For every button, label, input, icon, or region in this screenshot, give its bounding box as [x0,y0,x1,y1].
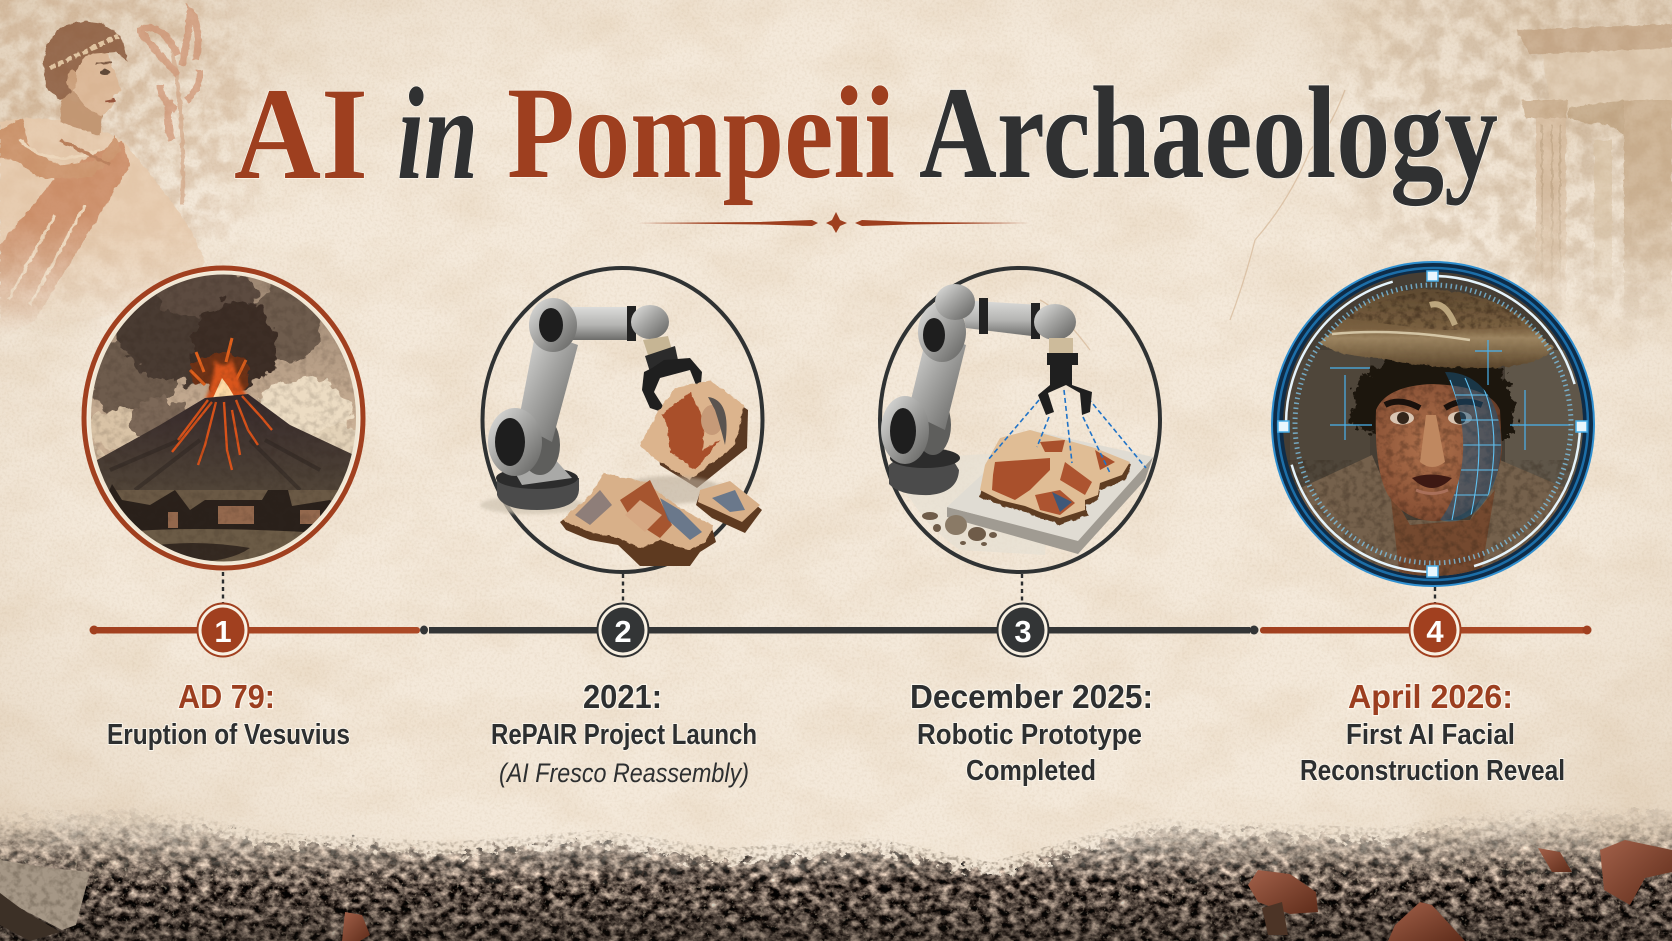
title: Archaeology [919,59,1498,206]
stone slab [0,860,90,930]
caption 4: First AI Facial [1346,719,1515,751]
rust rocks [342,840,1672,941]
scanning table [890,430,1153,555]
caption 1: AD 79: [178,678,275,715]
robot arm 3 [881,284,1092,495]
title: in [397,60,478,207]
title ornament [637,212,1031,233]
caption 4: Reconstruction Reveal [1300,755,1565,787]
scan lines [988,390,1146,473]
title: AI [234,60,368,207]
illustration 2: robot arm lifting fresco fragment [480,268,762,572]
timeline bar [90,626,1592,634]
robot arm 2 [480,298,702,514]
caption 2: (AI Fresco Reassembly) [499,758,749,788]
caption 2: 2021: [583,678,662,715]
fresco pieces on table [980,430,1131,525]
fragment held by the robot [640,381,748,488]
caption 3: December 2025: [910,678,1153,715]
illustration 3: robot arm scanning fresco on table [880,268,1160,572]
caption 2: RePAIR Project Launch [491,719,757,751]
milestone node 4 [1410,604,1460,656]
caption 3: Completed [966,755,1096,787]
temple columns, faded, top right [1322,0,1672,338]
fragments on the ground [560,473,762,566]
illustration 4: AI facial reconstruction [1272,262,1594,590]
milestone node 1: 1 [214,614,232,649]
stone on head [1320,289,1553,368]
milestone node 3: 3 [1014,614,1032,649]
milestone node 1 [198,604,248,656]
rubble ground [0,798,1672,941]
mesh overlay [1440,372,1502,522]
caption 2 [491,678,757,788]
caption 1 [107,678,350,751]
connector dotted lines [223,572,1435,604]
caption 4: April 2026: [1348,678,1513,715]
milestone node 2: 2 [614,614,632,649]
pebbles [922,512,997,546]
hud marks [1330,340,1570,450]
fresco figure, faded, top left [0,0,275,326]
title: Pompeii [507,59,895,206]
milestone node 3 [998,604,1048,656]
caption 3 [910,678,1153,787]
milestone node 4: 4 [1426,614,1444,649]
caption 1: Eruption of Vesuvius [107,719,350,751]
caption 3: Robotic Prototype [917,719,1142,751]
face [1376,384,1502,521]
caption 4 [1300,678,1565,787]
hair [1352,352,1514,435]
torso [1290,455,1576,576]
title [234,59,1498,207]
illustration 1: eruption of Vesuvius [82,266,366,570]
milestone node 2 [598,604,648,656]
